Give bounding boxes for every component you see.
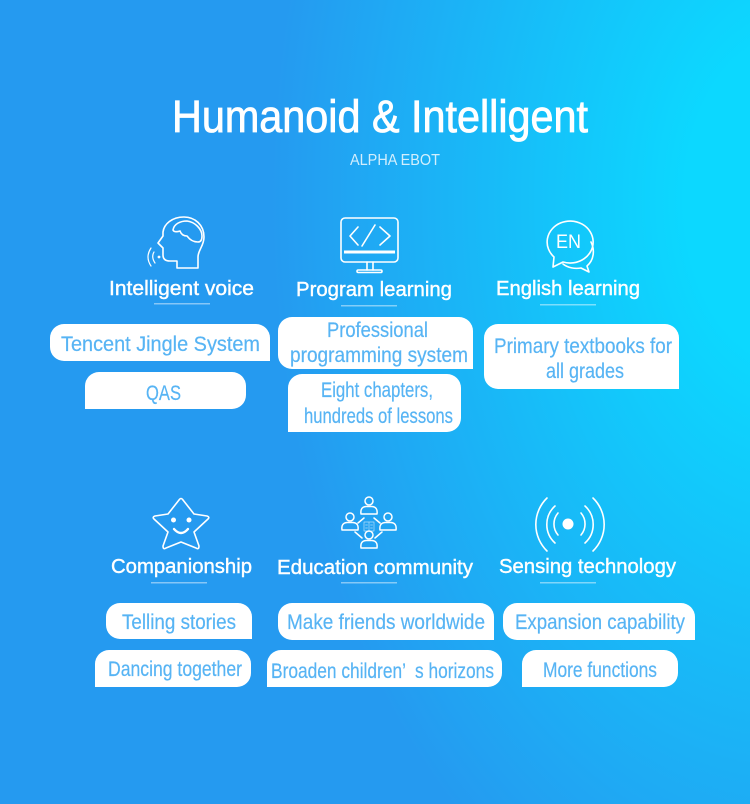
pill: Professional programming system: Professional [327,319,428,342]
pill: Broaden horizons [267,650,502,687]
pill: QAS: QAS [146,382,181,405]
icon: signal waves [536,498,604,551]
pill: Telling stories [106,603,252,639]
pill: Make friends worldwide: Make friends worldwide [287,611,485,634]
pill: Primary textbooks: all grades [546,360,624,383]
panel: program learning [278,218,473,432]
title: Humanoid & Intelligent [172,91,588,142]
pill: Tencent Jingle System [50,324,270,361]
pill: Eight chapters: hundreds of lessons [304,405,453,428]
icon: community around book [342,497,396,548]
pill: QAS [85,372,246,409]
heading: Sensing technology [499,555,677,578]
pill: Professional programming system: programming system [290,344,468,367]
pill: Primary textbooks: Primary textbooks for [494,335,672,358]
pill: Eight chapters: Eight chapters, [321,379,433,402]
pill: Telling stories: Telling stories [122,611,236,634]
icon: monitor with code [341,218,398,272]
pill: Expansion capability: Expansion capability [515,611,685,634]
heading: Program learning [296,278,452,301]
panel: english learning [484,221,679,389]
heading: English learning [496,277,640,300]
pill: Primary textbooks [484,324,679,389]
pill: Broaden horizons: Broaden children’ s horizons [271,660,494,683]
panel: companionship [95,498,252,687]
pill: Dancing together [95,650,251,687]
heading: Education community [277,556,474,579]
pill: Make friends worldwide [278,603,494,640]
heading: Intelligent voice [109,277,254,300]
pill: More functions [522,650,678,687]
pill: Tencent Jingle System: Tencent Jingle System [61,333,260,356]
heading: Companionship [111,555,252,578]
subtitle: ALPHA EBOT [350,152,440,169]
pill: Eight chapters [288,374,461,432]
icon: head with brain [148,217,204,268]
panel: intelligent voice [50,217,270,409]
pill: Dancing together: Dancing together [108,658,242,681]
panel: sensing technology [499,498,695,687]
pill: More functions: More functions [543,659,657,682]
pill: Professional programming system [278,317,473,369]
pill: Expansion capability [503,603,695,640]
icon: EN speech bubbles: EN [556,232,581,253]
icon: smiling star [153,498,209,549]
icon: EN speech bubbles [547,221,593,272]
panel: education community [267,497,502,687]
